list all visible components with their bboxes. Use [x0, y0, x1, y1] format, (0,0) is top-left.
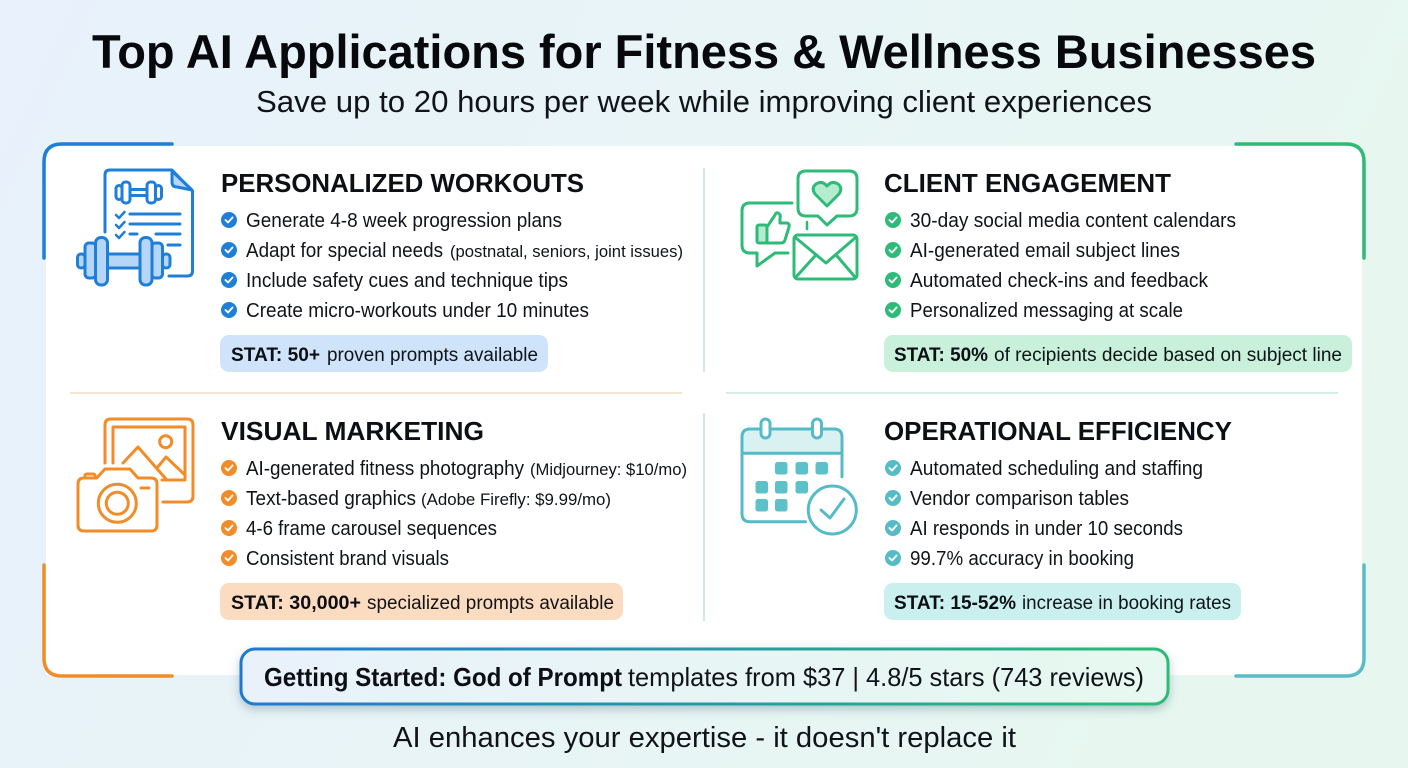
stat callout: increase in booking rates — [1022, 593, 1231, 614]
stat callout: STAT: 50+ — [231, 345, 320, 366]
stat callout — [884, 335, 1352, 372]
panel: visual marketing — [78, 416, 687, 620]
bullet list: Automated scheduling and staffing — [910, 458, 1203, 480]
bullet list: (Midjourney: $10/mo) — [530, 460, 687, 479]
bullet list: Create micro-workouts under 10 minutes — [246, 300, 589, 322]
panel: operational efficiency — [742, 416, 1241, 620]
bullet list: Vendor comparison tables — [910, 488, 1129, 510]
bullet list: 99.7% accuracy in booking — [910, 548, 1134, 570]
bullet list: 4-6 frame carousel sequences — [246, 518, 497, 540]
stat callout: STAT: 15-52% — [894, 593, 1016, 614]
icon: workout plan and dumbbell — [78, 170, 192, 285]
bullet list: Text-based graphics — [246, 488, 416, 510]
stat callout: of recipients decide based on subject line — [994, 345, 1342, 366]
icon: calendar with check — [742, 419, 856, 534]
stat callout: proven prompts available — [327, 345, 538, 366]
stat callout: STAT: 50% — [894, 345, 988, 366]
main white panel — [46, 146, 1362, 675]
heading: PERSONALIZED WORKOUTS — [221, 168, 584, 198]
bullet list: Adapt for special needs — [246, 240, 443, 262]
bullet list — [885, 458, 1203, 570]
corner bracket: green top right — [1236, 144, 1364, 258]
heading: CLIENT ENGAGEMENT — [884, 168, 1171, 198]
panel: personalized workouts — [78, 168, 683, 372]
bullet list: Generate 4-8 week progression plans — [246, 210, 562, 232]
bullet list: (Adobe Firefly: $9.99/mo) — [421, 490, 611, 509]
corner bracket: blue top left — [44, 144, 172, 258]
subtitle: Save up to 20 hours per week while improving client experiences — [256, 84, 1152, 119]
stat callout — [884, 583, 1241, 620]
closing tagline: AI enhances your expertise - it doesn't replace it — [393, 722, 1016, 754]
bullet list — [221, 210, 683, 322]
stat callout: STAT: 30,000+ — [231, 593, 361, 614]
bullet list: AI-generated email subject lines — [910, 240, 1180, 262]
corner bracket: teal bottom right — [1236, 565, 1364, 676]
bullet list: (postnatal, seniors, joint issues) — [450, 242, 683, 261]
heading: OPERATIONAL EFFICIENCY — [884, 416, 1232, 446]
icon: photo frame and camera — [78, 419, 193, 531]
getting started banner: Getting Started: God of Prompt — [264, 662, 622, 692]
icon: social bubbles and envelope — [742, 171, 857, 279]
heading: VISUAL MARKETING — [221, 416, 484, 446]
panel: client engagement — [742, 168, 1352, 372]
bullet list — [221, 458, 687, 570]
bullet list: Automated check-ins and feedback — [910, 270, 1209, 292]
stat callout — [220, 583, 623, 620]
stat callout: specialized prompts available — [367, 593, 614, 614]
title: Top AI Applications for Fitness & Wellness Businesses — [92, 25, 1316, 78]
bullet list: AI-generated fitness photography — [246, 458, 524, 480]
bullet list: Personalized messaging at scale — [910, 300, 1183, 322]
corner bracket: orange bottom left — [44, 565, 172, 676]
getting started banner — [241, 649, 1168, 704]
bullet list: Include safety cues and technique tips — [246, 270, 568, 292]
getting started banner: templates from $37 | 4.8/5 stars (743 reviews) — [628, 662, 1144, 692]
bullet list: AI responds in under 10 seconds — [910, 518, 1183, 540]
bullet list: Consistent brand visuals — [246, 548, 449, 570]
bullet list — [885, 210, 1236, 322]
bullet list: 30-day social media content calendars — [910, 210, 1236, 232]
stat callout — [220, 335, 548, 372]
